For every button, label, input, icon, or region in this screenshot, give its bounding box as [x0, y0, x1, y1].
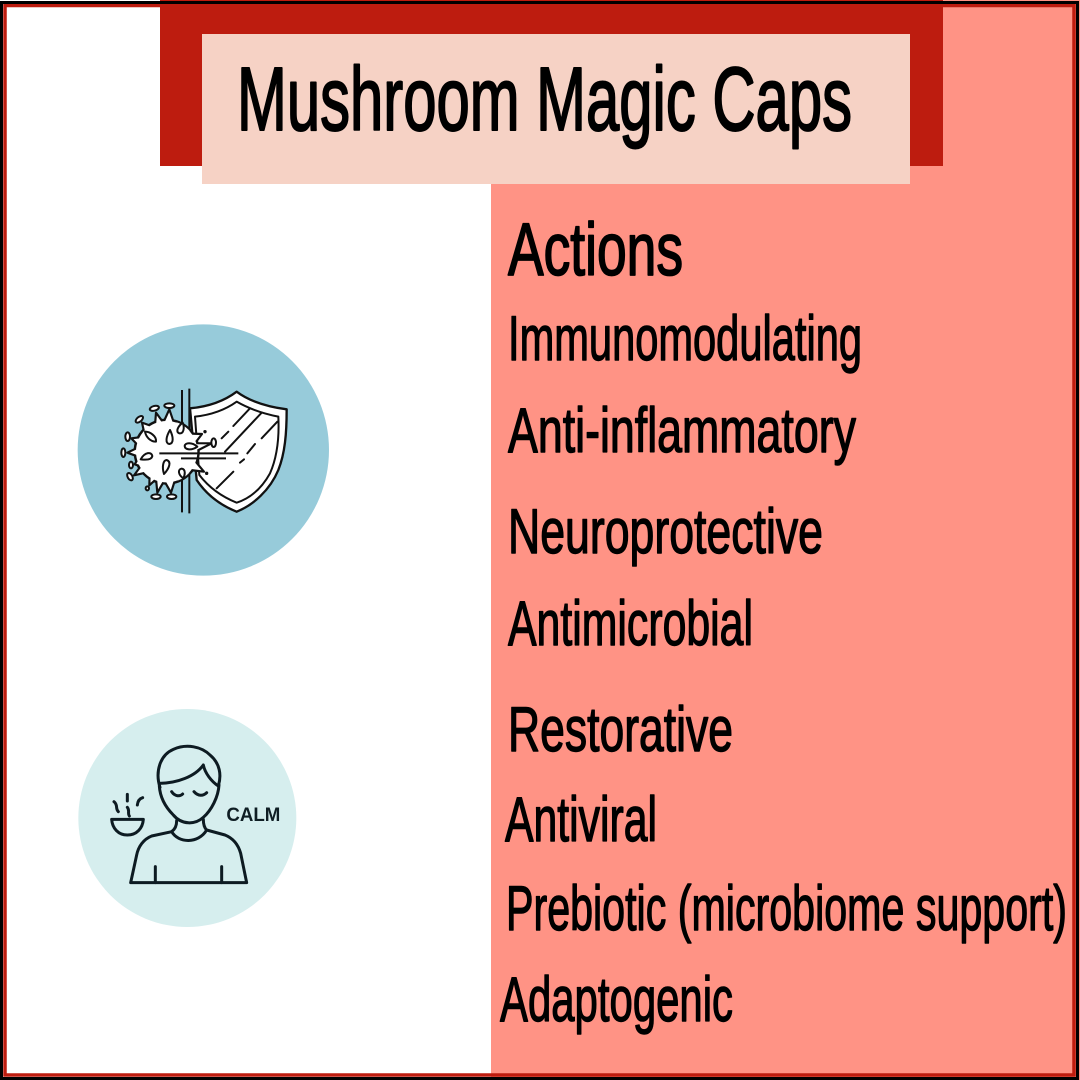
barrier lines [182, 389, 189, 513]
virus [121, 403, 216, 499]
action list [500, 304, 1067, 1035]
shield [190, 392, 287, 512]
item: Neuroprotective: Neuroprotective [508, 497, 823, 567]
icon circle [78, 709, 296, 927]
icon circle [78, 324, 329, 576]
item: Antiviral: Antiviral [505, 785, 657, 855]
steam [114, 794, 143, 816]
item: Anti-inflammatory: Anti-inflammatory [508, 396, 856, 466]
item: Immunomodulating: Immunomodulating [508, 304, 862, 374]
label: CALM: CALM [226, 805, 280, 826]
bowl [112, 819, 143, 835]
title plate [202, 34, 910, 184]
horizontal arrows [159, 453, 238, 458]
item: Antimicrobial: Antimicrobial [508, 589, 753, 659]
person [112, 746, 247, 883]
icon: calm person [78, 709, 296, 927]
icon: virus against shield [78, 324, 329, 576]
title backing bar [160, 0, 943, 166]
item: Adaptogenic: Adaptogenic [500, 965, 733, 1035]
panel: actions background [491, 0, 1080, 1080]
item: Restorative: Restorative [508, 695, 733, 765]
heading: Actions: Actions [508, 208, 683, 291]
